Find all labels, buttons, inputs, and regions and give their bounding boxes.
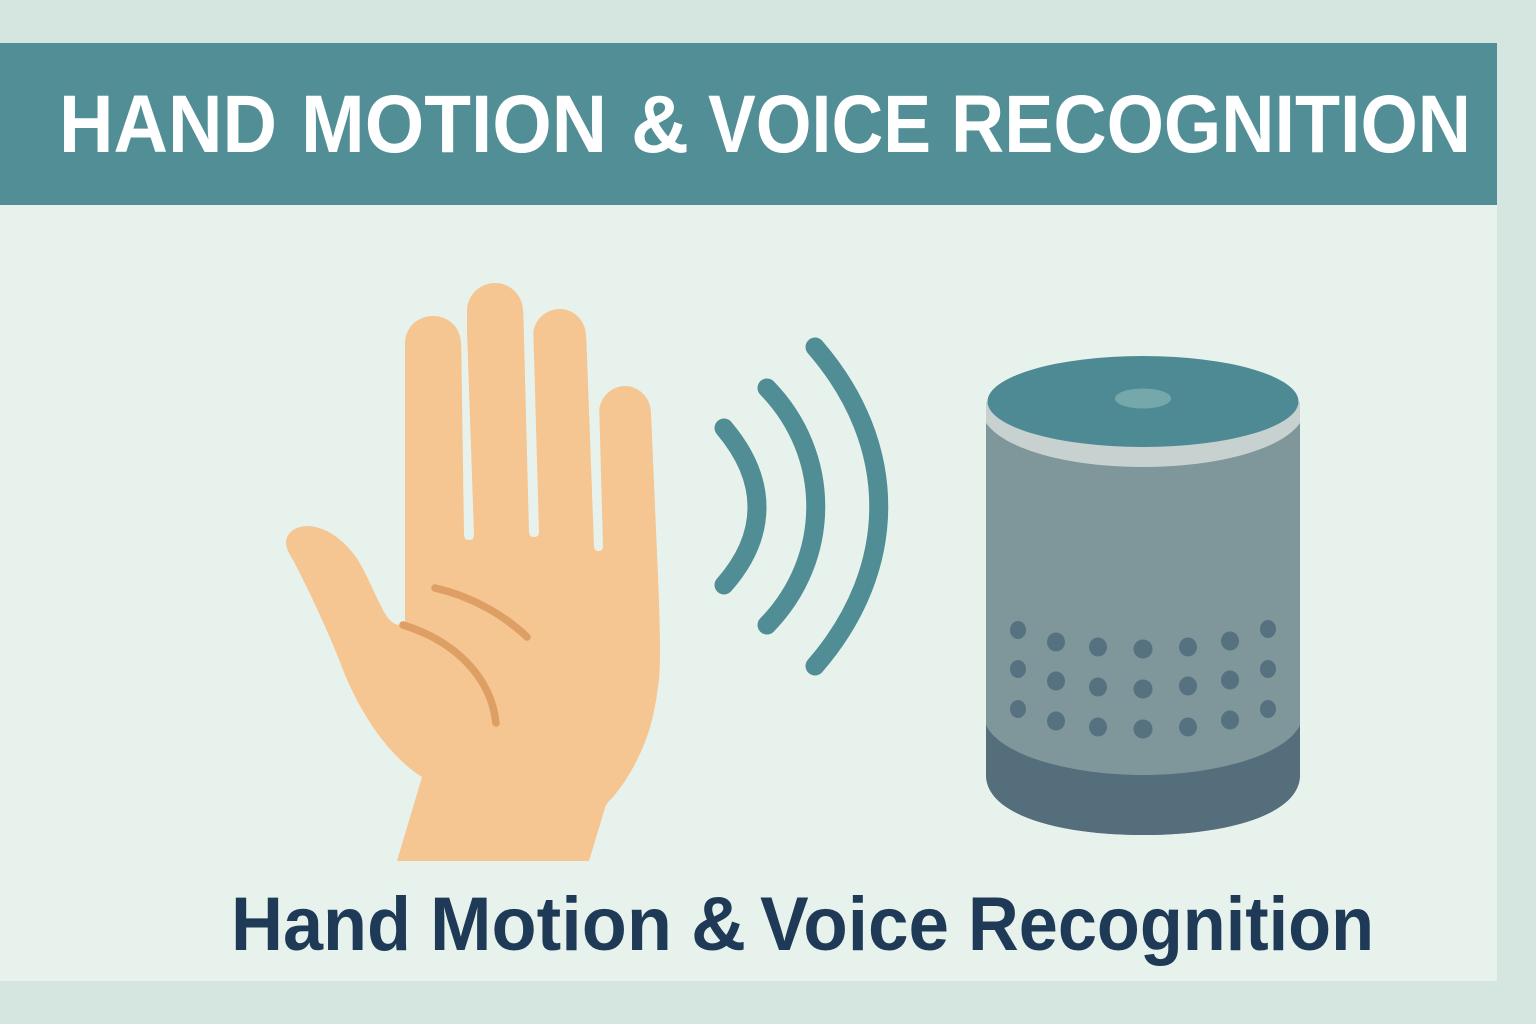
icon: sound waves	[724, 347, 879, 666]
caption: Voice	[760, 882, 949, 967]
speaker light	[1115, 388, 1171, 408]
title: &	[631, 79, 689, 170]
title: VOICE	[708, 79, 931, 170]
speaker base	[986, 725, 1300, 835]
speaker top	[988, 356, 1298, 447]
title	[59, 79, 1471, 170]
title banner	[0, 43, 1497, 205]
title: RECOGNITION	[951, 79, 1471, 170]
finger gaps	[461, 330, 474, 540]
caption	[231, 882, 1374, 967]
title: HAND	[59, 79, 277, 170]
caption: Hand	[231, 882, 411, 967]
caption: Motion	[430, 882, 672, 967]
icon: raised hand	[286, 283, 660, 861]
palm lines	[403, 588, 527, 723]
caption: Recognition	[968, 882, 1374, 967]
caption: &	[691, 882, 746, 967]
icon: smart speaker	[986, 356, 1300, 835]
speaker grille	[1010, 620, 1276, 738]
speaker rim	[986, 402, 1300, 467]
title: MOTION	[301, 79, 607, 170]
